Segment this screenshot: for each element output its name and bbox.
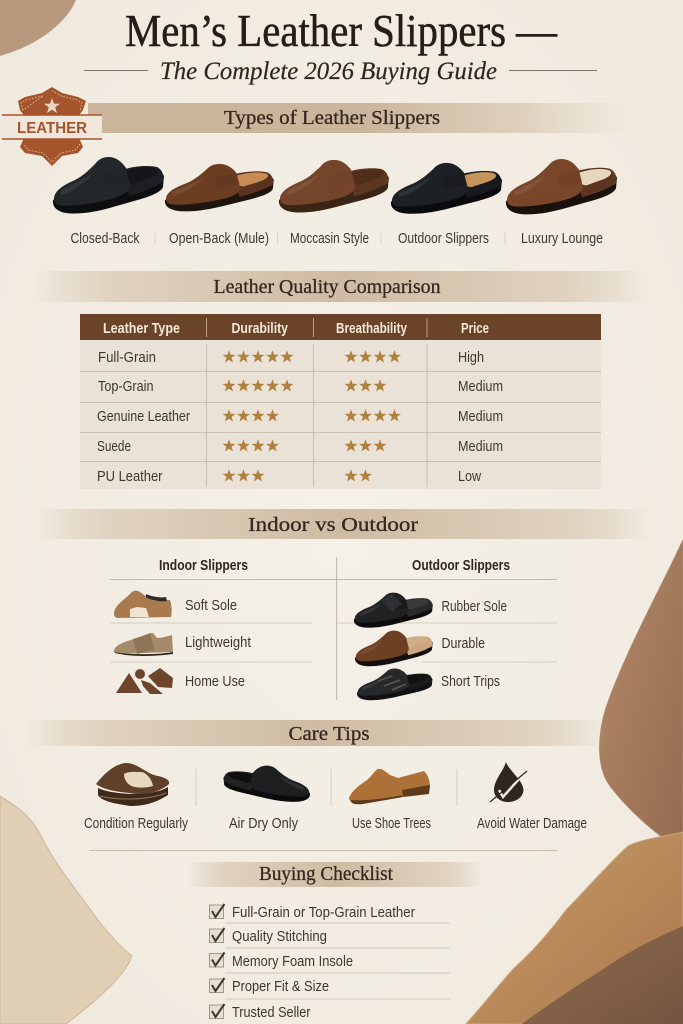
table header: Durability <box>232 321 288 337</box>
row: full-grain: High <box>458 349 484 366</box>
row: pu leather: PU Leather <box>97 468 162 485</box>
row: genuine leather: Genuine Leather <box>97 408 190 425</box>
panel: indoor slippers: Indoor Slippers <box>159 557 248 574</box>
leather patch: bottom right brown <box>522 926 683 1024</box>
panel: indoor slippers <box>110 557 337 694</box>
row: genuine leather <box>97 408 503 425</box>
icon: home use <box>116 668 173 694</box>
slipper: closed-back <box>53 157 164 214</box>
section band: leather quality comparison: Leather Quality Comparison <box>214 276 440 298</box>
panel: outdoor slippers <box>337 557 557 700</box>
panel: outdoor slippers: Rubber Sole <box>442 598 507 615</box>
care tip: use shoe trees <box>349 769 431 832</box>
icon: lightweight slipper <box>113 633 173 656</box>
care tip: avoid water damage: Avoid Water Damage <box>477 815 587 832</box>
table header <box>80 314 601 340</box>
section band: care tips <box>25 720 605 746</box>
row: full-grain <box>98 349 484 366</box>
subtitle: The Complete 2026 Buying Guide <box>160 58 497 85</box>
section band: types of leather slippers <box>88 103 640 133</box>
row: suede <box>97 438 503 455</box>
panel: indoor slippers: Soft Sole <box>185 597 237 614</box>
slipper row <box>53 157 617 214</box>
row: genuine leather: Medium <box>458 408 503 425</box>
care tip: air dry only: Air Dry Only <box>229 815 298 832</box>
section band: types of leather slippers: Types of Leather Slippers <box>224 107 440 129</box>
slipper: moccasin style <box>279 160 389 213</box>
title: Men’s Leather Slippers — <box>125 5 558 56</box>
care tip: condition regularly <box>84 763 188 832</box>
slipper labels <box>70 230 603 247</box>
section band: buying checklist <box>188 862 483 887</box>
section band: indoor vs outdoor <box>35 509 650 539</box>
table header: Leather Type <box>103 321 180 337</box>
section band: care tips: Care Tips <box>288 723 370 745</box>
leather patch: bottom left <box>0 796 132 1024</box>
icon: leather badge <box>2 87 102 166</box>
slipper labels: Outdoor Slippers <box>398 230 489 247</box>
row: top-grain <box>98 378 503 395</box>
slipper: outdoor <box>391 163 502 214</box>
icon: rubber sole slipper <box>354 593 433 628</box>
row: pu leather <box>97 468 481 485</box>
care tip: avoid water damage <box>477 762 587 832</box>
buying checklist <box>210 904 450 1021</box>
panel: outdoor slippers: Short Trips <box>441 673 500 690</box>
slipper labels: Moccasin Style <box>290 230 369 247</box>
item: trusted seller: Trusted Seller <box>232 1004 311 1021</box>
leather patch: bottom right tan <box>466 832 683 1024</box>
icon: soft sole slipper <box>114 591 172 618</box>
comparison table <box>80 314 601 489</box>
slipper labels: Open-Back (Mule) <box>169 230 269 247</box>
leather patch: top left <box>0 0 76 56</box>
slipper: luxury lounge <box>506 159 617 214</box>
slipper: open-back mule <box>165 164 274 211</box>
item: proper fit and size: Proper Fit & Size <box>232 978 329 995</box>
slipper labels: Closed-Back <box>70 230 140 247</box>
row: top-grain: Medium <box>458 378 503 395</box>
icon: durable slipper <box>355 631 433 666</box>
row: full-grain: Full-Grain <box>98 349 156 366</box>
row: top-grain: Top-Grain <box>98 378 154 395</box>
icon: black clog <box>223 766 310 802</box>
row: pu leather: Low <box>458 468 481 485</box>
panel: outdoor slippers: Durable <box>442 635 485 652</box>
slipper labels: Luxury Lounge <box>521 230 603 247</box>
section band: leather quality comparison <box>35 271 645 302</box>
care tip: air dry only <box>223 766 310 832</box>
panel: indoor slippers: Lightweight <box>185 634 252 651</box>
table header: Breathability <box>336 321 407 337</box>
icon: short trips slipper <box>357 669 432 700</box>
table header: Price <box>461 321 489 337</box>
icon: tan loafer <box>349 769 430 804</box>
section band: buying checklist: Buying Checklist <box>259 863 393 885</box>
leather patch: right <box>600 540 683 851</box>
item: memory foam insole: Memory Foam Insole <box>232 953 353 970</box>
panel: indoor slippers: Home Use <box>185 673 245 690</box>
item: full-grain or top-grain leather: Full-Grain or Top-Grain Leather <box>232 904 415 921</box>
item: quality stitching: Quality Stitching <box>232 928 327 945</box>
icon: leather badge: LEATHER <box>17 120 87 137</box>
row: suede: Suede <box>97 438 131 455</box>
care tip: condition regularly: Condition Regularly <box>84 815 188 832</box>
section band: indoor vs outdoor: Indoor vs Outdoor <box>248 514 418 536</box>
icon: conditioning cloth <box>96 763 169 806</box>
panel: outdoor slippers: Outdoor Slippers <box>412 557 510 574</box>
care tip: use shoe trees: Use Shoe Trees <box>352 815 431 832</box>
icon: water drop with slash <box>490 762 527 802</box>
row: suede: Medium <box>458 438 503 455</box>
item: trusted seller <box>210 1004 311 1021</box>
